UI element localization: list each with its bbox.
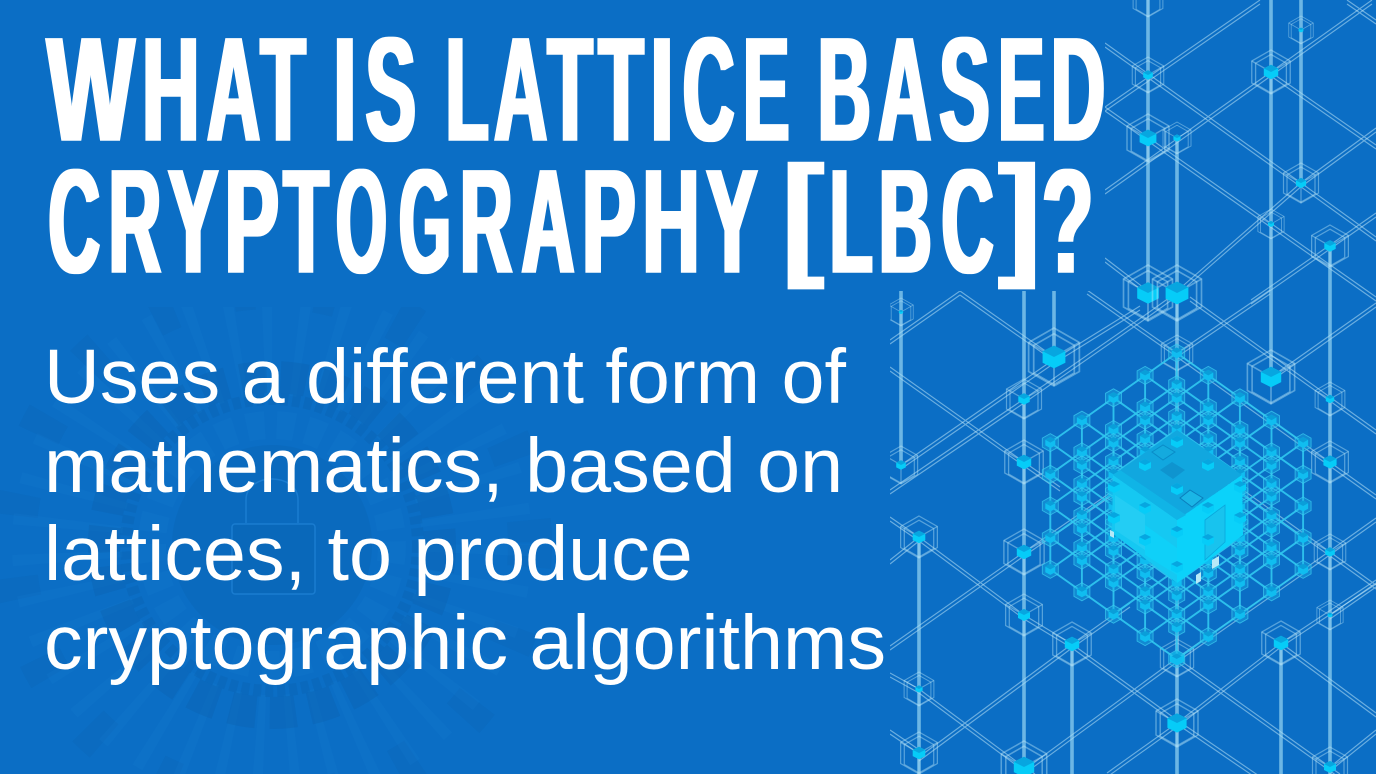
title: R (109, 138, 161, 305)
description text: lattices, to produce (44, 511, 693, 597)
diagonal lattice lines (890, 0, 1376, 774)
title: S (939, 6, 990, 173)
title: ] (998, 138, 1040, 291)
title: B (818, 6, 871, 173)
title: A (878, 6, 931, 173)
title: C (48, 138, 100, 305)
title: E (998, 6, 1044, 173)
title: H (142, 6, 200, 173)
title: I (650, 6, 674, 173)
title: T (261, 6, 306, 173)
description text (44, 334, 886, 686)
title: [ (783, 138, 824, 291)
title: G (399, 138, 451, 305)
central glowing cube (1108, 430, 1246, 584)
lattice network illustration (884, 0, 1376, 774)
description text: Uses a different form of (44, 334, 846, 420)
description text: cryptographic algorithms (44, 600, 886, 686)
wireframe nodes (884, 0, 1348, 774)
title: P (582, 138, 636, 305)
title: L (830, 138, 873, 305)
title: A (207, 6, 260, 173)
title: E (743, 6, 789, 173)
title: S (366, 6, 416, 173)
central lattice grid (1042, 344, 1311, 668)
title: Y (706, 138, 756, 305)
title: ? (1042, 138, 1094, 305)
title: P (225, 138, 279, 305)
vertical lattice lines (901, 0, 1330, 774)
title: L (446, 6, 489, 173)
title: H (642, 138, 700, 305)
title: R (460, 138, 512, 305)
title: W (47, 6, 135, 173)
title: T (548, 6, 592, 173)
title: I (333, 6, 356, 173)
title (47, 6, 1105, 305)
title: A (522, 138, 574, 305)
title: A (494, 6, 547, 173)
title: O (336, 138, 387, 305)
title: C (942, 138, 994, 305)
title: B (879, 138, 932, 305)
title: T (284, 138, 328, 305)
description text: mathematics, based on (44, 423, 843, 509)
title: C (683, 6, 734, 173)
title: T (599, 6, 644, 173)
title: D (1051, 6, 1105, 173)
title: Y (168, 138, 218, 305)
faint lock and radial pattern (88, 362, 455, 725)
